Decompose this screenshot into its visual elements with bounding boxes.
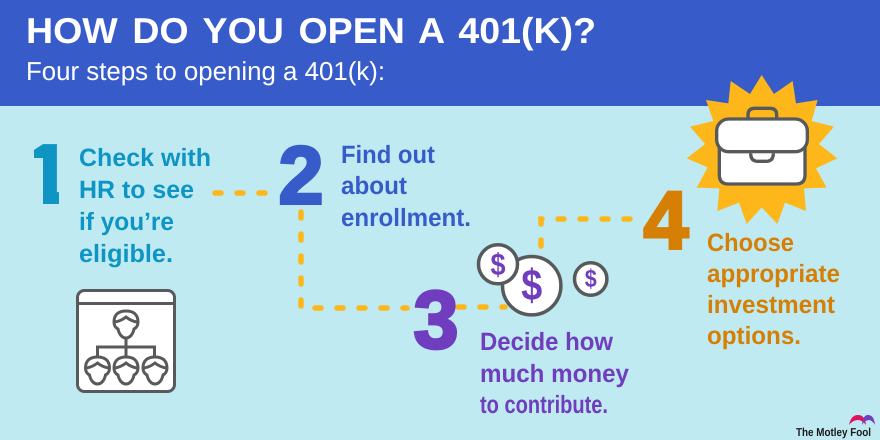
step 3 text: Decide how: [480, 328, 614, 356]
icon: dollar coins: $: [490, 247, 506, 282]
step 3: [414, 275, 629, 419]
step 4 text: Choose: [707, 229, 794, 257]
icon: dollar coins: $: [521, 261, 542, 310]
step 2 text: enrollment.: [341, 204, 471, 232]
step 1 text: HR to see: [79, 176, 194, 204]
step 2 text: Find out: [341, 141, 436, 169]
step 2 text: about: [341, 172, 408, 200]
step 2 text: [341, 141, 471, 232]
step 4 text: options.: [707, 322, 801, 350]
step 3 text: to contribute.: [480, 391, 608, 419]
header band: [0, 0, 880, 106]
step 2: [278, 130, 471, 232]
subtitle: Four steps to opening a 401(k):: [26, 56, 385, 86]
step 1: [34, 144, 210, 268]
logo jester hat: [849, 415, 875, 425]
number 1: 1: [24, 130, 70, 221]
briefcase: [717, 108, 807, 184]
step 4 text: appropriate: [707, 260, 840, 288]
number 4: 4: [644, 176, 689, 266]
icon: dollar coins: $: [585, 265, 597, 293]
icon: org chart window: [78, 290, 174, 392]
step 3 text: [480, 328, 629, 419]
step 4: [644, 176, 840, 350]
step 1 text: if you’re: [79, 208, 174, 236]
step 1 text: [79, 144, 211, 268]
dashed connector path: [215, 193, 634, 308]
starburst: [687, 75, 837, 224]
title: HOW DO YOU OPEN A 401(K)?: [26, 10, 596, 51]
step 1 text: eligible.: [79, 240, 173, 268]
step 4 text: [707, 229, 840, 350]
step 1 text: Check with: [79, 144, 211, 172]
step 3 text: much money: [480, 360, 629, 388]
number 2: 2: [278, 130, 324, 222]
icon: dollar coins: [478, 245, 607, 315]
icon: briefcase on starburst: [687, 75, 837, 224]
logo: The Motley Fool: [796, 415, 875, 439]
step 4 text: investment: [707, 291, 836, 319]
number 3: 3: [414, 275, 458, 366]
